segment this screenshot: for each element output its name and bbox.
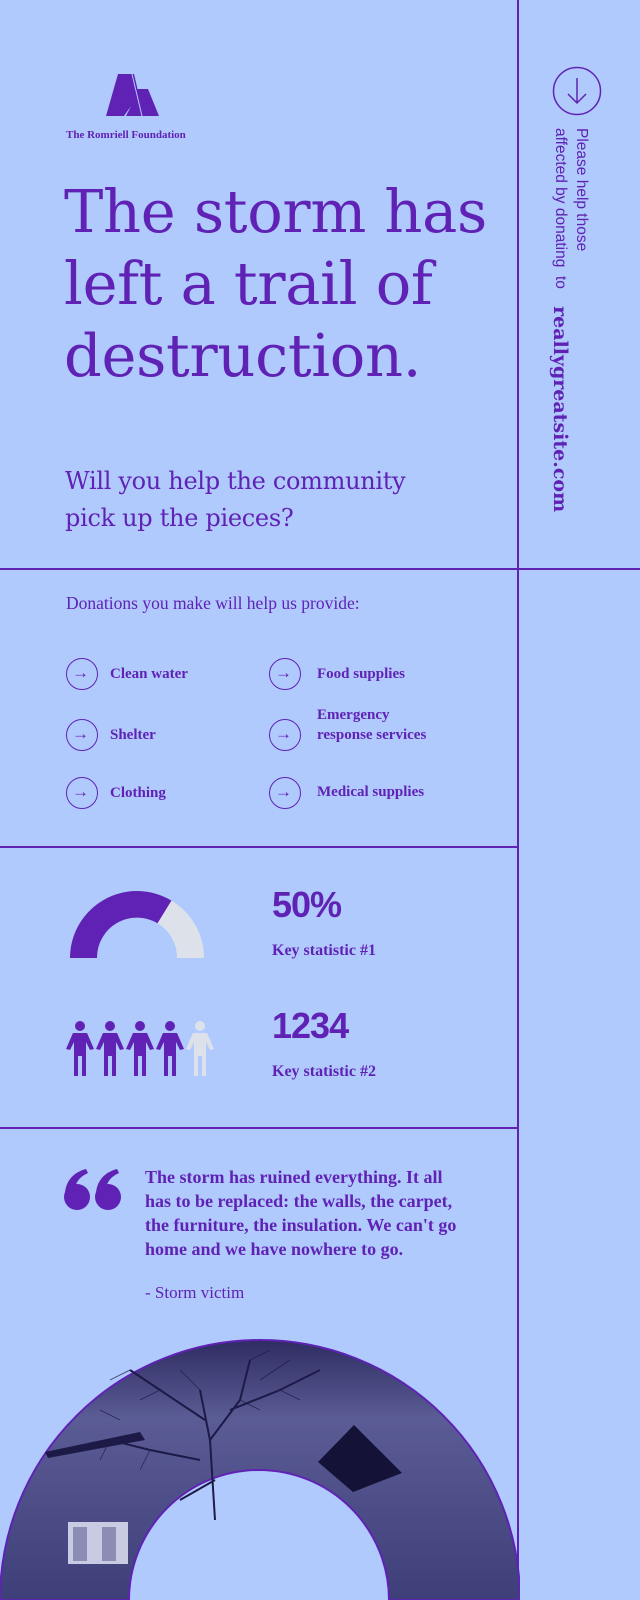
subtitle: Will you help the community — [65, 467, 405, 495]
subtitle — [65, 467, 406, 532]
vertical text — [549, 128, 590, 512]
vertical text: Please help those — [573, 128, 590, 251]
quote text: has to be replaced: the walls, the carpet, — [145, 1191, 452, 1211]
panel: donations — [66, 593, 426, 809]
icon: logo mark — [106, 74, 159, 116]
icon: quote marks — [64, 1169, 121, 1210]
image: flooded landscape arch — [0, 1339, 520, 1600]
logo — [66, 74, 186, 141]
list items: → — [275, 724, 292, 743]
heading: Donations you make will help us provide: — [66, 593, 360, 613]
panel: statistics: Key statistic #2 — [272, 1063, 376, 1080]
panel: statistics — [66, 884, 376, 1080]
panel: quote — [64, 1167, 456, 1302]
list items: → — [275, 663, 292, 682]
list items: Clean water — [110, 666, 188, 682]
quote text: The storm has ruined everything. It all — [145, 1167, 443, 1187]
list items: Food supplies — [317, 666, 405, 682]
list items: → — [72, 663, 89, 682]
list items: → — [275, 782, 292, 801]
quote text: the furniture, the insulation. We can't go — [145, 1215, 456, 1235]
list items: → — [72, 724, 89, 743]
title: destruction. — [64, 321, 421, 390]
list items: Emergency — [317, 707, 389, 723]
side call to action — [549, 66, 602, 512]
icon: people pictogram — [66, 1021, 214, 1076]
attribution: - Storm victim — [145, 1283, 244, 1302]
subtitle: pick up the pieces? — [65, 504, 293, 532]
quote text — [145, 1167, 456, 1259]
icon: down arrow circle — [552, 66, 602, 116]
vertical text: affected by donating to reallygreatsite.com — [549, 128, 571, 512]
list items: Clothing — [110, 785, 166, 801]
chart: half donut 50% — [70, 891, 204, 958]
title: The storm has — [64, 177, 487, 246]
list items: Medical supplies — [317, 784, 424, 800]
list items: response services — [317, 727, 426, 743]
list items: → — [72, 782, 89, 801]
panel: statistics: Key statistic #1 — [272, 942, 376, 959]
quote text: home and we have nowhere to go. — [145, 1239, 403, 1259]
title — [64, 177, 487, 390]
stat 2: 1234 — [272, 1005, 348, 1046]
stat 1: 50% — [272, 884, 341, 925]
title: left a trail of — [64, 249, 432, 318]
list items: Shelter — [110, 727, 156, 743]
list items — [66, 658, 426, 809]
logo text: The Romriell Foundation — [66, 129, 186, 141]
